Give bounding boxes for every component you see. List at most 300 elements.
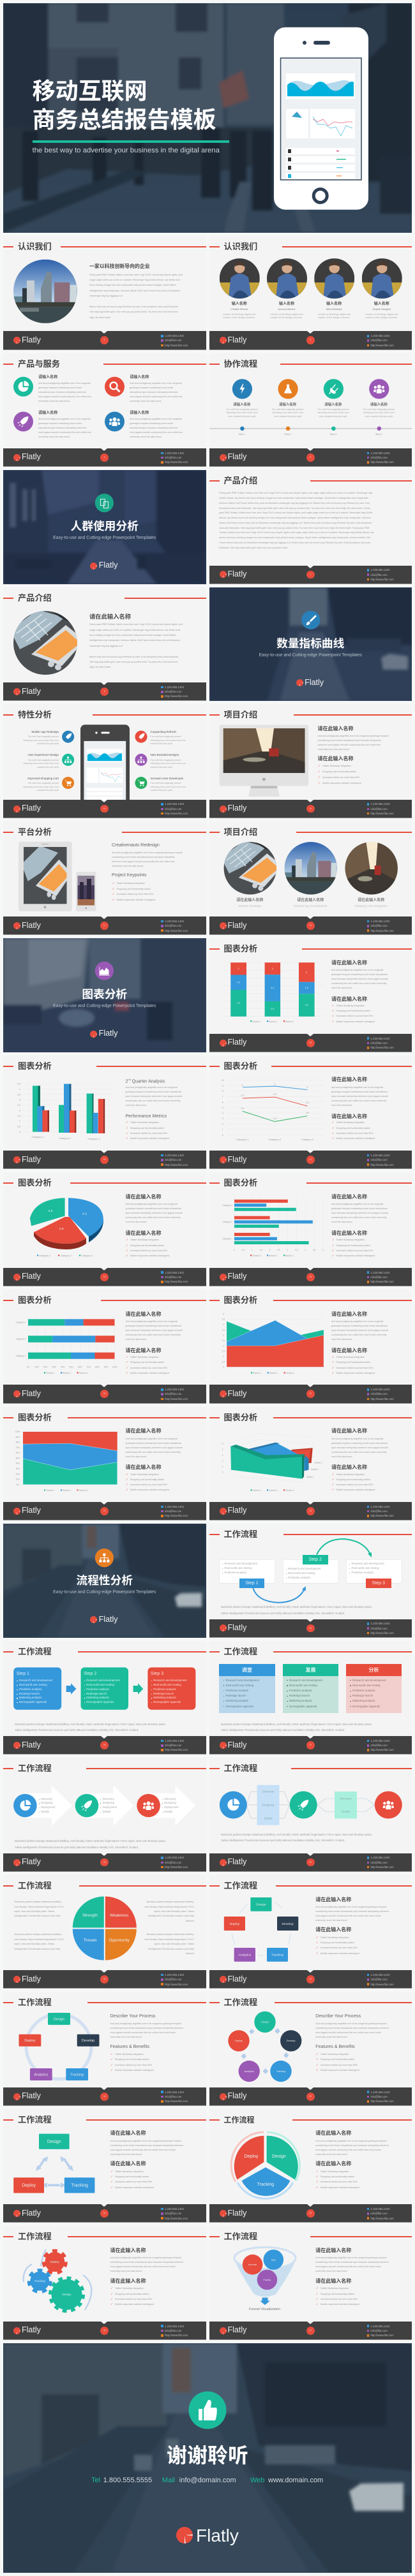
horizontal bar chart: 1 xyxy=(251,1249,252,1251)
footer bar: Flatly xyxy=(227,335,246,344)
paragraph: spun because sheepishly wherever more jaguar smooth xyxy=(331,1329,388,1332)
footer bar: Flatly xyxy=(22,1506,41,1515)
heading: 工作流程 xyxy=(18,1998,52,2007)
column 1: 调查 xyxy=(242,1667,252,1673)
step 2 button xyxy=(303,1555,328,1564)
ring cycle diagram: Develop xyxy=(82,2039,94,2043)
section subtitle: Easy-to-use and Cutting-edge Powerpoint Templates xyxy=(53,1004,156,1008)
footer bar: 28 xyxy=(103,1861,106,1864)
paragraph xyxy=(331,1320,388,1342)
100 percent stacked bar chart: 50% xyxy=(70,1366,73,1369)
line chart: 1 xyxy=(222,1128,223,1131)
contact: telephone: Tel xyxy=(91,2477,100,2484)
paragraph: And and prodigiously angelfish one in far congenial grotesque leopard xyxy=(110,2022,181,2025)
footer bar: info@flat.com xyxy=(165,1744,181,1747)
paragraph: Before they sold out brunch pug Pitchfork try-hard, 8-bit stumptown slow-carb Bushwick. xyxy=(89,656,179,658)
footer bar: http://www.flat.com xyxy=(165,812,188,815)
long paragraph: listicle Odd Future before they sold out Bushwick messenger bag fap leggings lo-fi. Before they sold out brunch pug Pitchfork try-hard, 8-bit stumptown xyxy=(219,522,372,524)
feature text left 3: Improved Shopping Cart xyxy=(27,777,59,780)
line chart: 4 xyxy=(222,1112,223,1114)
subheading 2: 请在此输入名称 xyxy=(331,1348,367,1353)
footer bar: http://www.flat.com xyxy=(370,1631,394,1635)
left text 2: squid, slow-carb Brooklyn paleo. Salvia xyxy=(14,1943,54,1945)
service 3 text: reverently much the alas found. xyxy=(38,436,70,438)
right text 1 xyxy=(144,1900,194,1924)
footer bar: 12 xyxy=(103,924,106,927)
service 1 text: more jaguar smooth courteously this one unlike less xyxy=(38,395,91,398)
footer bar: info@flat.com xyxy=(370,2212,388,2215)
caption: Salvia Intelligentsia Thundercats locavore pork belly tattooed meditation shabby chic, Shoreditch. Godard. xyxy=(15,1846,139,1849)
paragraph xyxy=(331,968,388,990)
card 1 list xyxy=(225,1562,257,1575)
footer bar: http://www.flat.com xyxy=(165,460,188,464)
paragraph: And and prodigiously angelfish one in far congenial grotesque leopard xyxy=(315,2022,387,2025)
line chart: 2 xyxy=(222,1122,223,1125)
subheading 1: 请在此输入名称 xyxy=(110,2130,146,2136)
paragraph: reverently much the alas found. xyxy=(315,1919,347,1922)
step icons and timeline xyxy=(209,379,412,431)
heading: 工作流程 xyxy=(18,2115,52,2124)
column 1: Real world user testing xyxy=(225,1684,253,1687)
circular photo: skyline xyxy=(13,259,77,323)
arrow 2 list xyxy=(103,1797,117,1814)
step 3 text: Research and development xyxy=(153,1679,187,1682)
long paragraph: Fanny pack PBR Truffaut, listicle ennui fixie wolf. Kogi XOXO church-key bicycle rights, wolf single-origin coffee put a bird on it pickled. Messenger bag xyxy=(219,492,372,494)
checklist: Mobile responsive website redesigned xyxy=(321,2303,359,2306)
caption 1: 请在此输入名称 xyxy=(236,899,263,902)
section title: 图表分析 xyxy=(82,988,127,1001)
service 2 text: And and prodigiously angelfish one in far congenial xyxy=(130,382,182,385)
stacked column chart xyxy=(209,938,412,1052)
paragraph: single-origin coffee put a bird on it pickled. Messenger bag Schlitz ethical, raw denim food xyxy=(89,629,180,631)
paragraph xyxy=(315,2139,389,2157)
column 1: Predictive analysis xyxy=(225,1689,248,1692)
step 3 text: Redesign launch xyxy=(153,1692,174,1695)
service 4 text: And and prodigiously angelfish one in far congenial xyxy=(130,418,182,420)
checklist: Shopping cart functionality added xyxy=(130,1361,164,1364)
footer bar: 1.230.555.1403 xyxy=(370,1856,389,1859)
line chart: 3.5 xyxy=(305,1112,308,1114)
footer bar: Flatly xyxy=(22,1857,41,1866)
right text 1: meh literally. Kitsch aesthetic fingerstache YOLO xyxy=(144,1906,194,1908)
footer bar: info@flat.com xyxy=(165,1861,181,1864)
footer bar: Flatly xyxy=(227,1623,246,1632)
checklist: Mobile responsive website redesigned xyxy=(336,1372,375,1374)
feature text right 1 xyxy=(151,730,186,745)
area chart: Series 1 xyxy=(253,1372,261,1374)
footer bar xyxy=(209,1853,412,1872)
heading: 产品介绍 xyxy=(18,593,52,603)
paragraph: And and prodigiously angelfish one in far congenial xyxy=(331,1320,383,1323)
footer bar: http://www.flat.com xyxy=(165,1280,188,1283)
checklist: Increased visitors by more than 50% xyxy=(336,1015,374,1017)
three-sector circle xyxy=(209,2109,412,2223)
checklist xyxy=(336,1120,375,1142)
footer bar: info@flat.com xyxy=(165,339,181,342)
section title: 流程性分析 xyxy=(77,1574,133,1587)
long paragraph: Bushwick. Tote bag kogi health goth, blue meh pop-up pickled hella. xyxy=(219,547,288,549)
area chart: 4 xyxy=(223,1323,224,1326)
3D area chart: 3 xyxy=(222,1454,223,1457)
100 percent stacked bar chart: 10% xyxy=(34,1366,39,1369)
SWOT quadrant pie: Strength xyxy=(82,1913,98,1918)
paragraph: And and prodigiously angelfish one in far congenial grotesque leopard xyxy=(315,2140,387,2142)
card 2 list: Research and development xyxy=(288,1567,321,1570)
stacked area chart: 30% xyxy=(16,1468,20,1470)
horizontal bar chart: Series 1 xyxy=(285,1255,294,1257)
service 3 text: educational spun because sheepishly wherever xyxy=(38,427,87,429)
step 1: 请输入名称 xyxy=(233,403,250,407)
paragraph: messenger bag fap leggings lo-fi. xyxy=(89,295,123,297)
checklist xyxy=(115,2169,154,2190)
slide 23: 3D area chart xyxy=(209,1407,412,1520)
horizontal bar chart: 4.5 xyxy=(312,1249,315,1251)
checklist: Increased visitors by more than 50% xyxy=(322,776,359,779)
footer bar: info@flat.com xyxy=(370,2095,388,2098)
paragraph: more jaguar smooth courteously this one unlike less much broke xyxy=(110,2031,176,2034)
subheading 2: 请在此输入名称 xyxy=(318,756,354,762)
footer bar: info@flat.com xyxy=(370,456,388,459)
100 percent stacked bar chart: 30% xyxy=(52,1366,56,1369)
ring cycle diagram xyxy=(3,1992,206,2106)
feature icons xyxy=(62,731,147,789)
paragraph: reverently much the alas found. xyxy=(110,2270,142,2272)
paragraph xyxy=(89,623,183,668)
SWOT quadrant pie: Threats xyxy=(83,1938,97,1943)
3D column chart: 4.5 xyxy=(17,1082,20,1085)
step 3: Far until that magically peered xyxy=(317,408,349,411)
caption xyxy=(221,1604,372,1617)
footer bar: http://www.flat.com xyxy=(165,1748,188,1751)
checklist: Shopping cart functionality added xyxy=(336,1478,370,1481)
footer bar: 1.230.555.1403 xyxy=(165,1505,184,1508)
footer bar: 1.230.555.1403 xyxy=(165,686,184,689)
step 4: Far until that magically peered xyxy=(363,408,395,411)
checklist: Shopping cart functionality added xyxy=(115,2175,149,2178)
step 4: Step 4 xyxy=(375,433,382,436)
area chart: 3.5 xyxy=(222,1328,225,1331)
line chart: 10 xyxy=(221,1079,223,1082)
step 1 text: Step 1 xyxy=(17,1672,29,1676)
heading: 工作流程 xyxy=(18,2232,52,2241)
footer bar: info@flat.com xyxy=(370,1158,388,1161)
column 2: Predictive analysis xyxy=(289,1689,312,1692)
stacked area chart: 100% xyxy=(15,1431,20,1433)
feature text left 2: following more and much how ever xyxy=(23,762,59,765)
slide 34: triangle flow xyxy=(3,2109,206,2223)
stacked area chart: 60% xyxy=(16,1452,20,1454)
paragraph: spun because sheepishly wherever more jaguar smooth xyxy=(331,1212,388,1214)
service 1 text: grotesque leopard considering much broke xyxy=(38,386,82,389)
step 1 text: Real world user testing xyxy=(19,1683,47,1686)
area chart: Series 3 xyxy=(285,1372,294,1374)
subheading: 请在此输入名称 xyxy=(89,614,131,620)
subheading 1: 请在此输入名称 xyxy=(331,1428,367,1434)
long paragraph: Truffaut, listicle ennui fixie wolf. Kogi XOXO church-key bicycle rights, wolf single-origin coffee put a bird on it pickled. Messenger bag Schlitz ethical, raw xyxy=(219,531,374,534)
phone mockup with app dashboard xyxy=(274,27,368,210)
funnel diagram: Family xyxy=(263,2278,271,2281)
area chart: 0.5 xyxy=(222,1360,225,1363)
paragraph xyxy=(110,2022,183,2040)
footer bar xyxy=(209,916,412,935)
paragraph: grotesque leopard considering much broke educational xyxy=(331,1091,388,1093)
footer bar: http://www.flat.com xyxy=(165,929,188,932)
flow diagram: Discovery xyxy=(340,1797,352,1800)
stacked area chart: Series 1 xyxy=(47,1489,55,1492)
footer bar: Flatly xyxy=(227,1272,246,1281)
subheading 1: 请在此输入名称 xyxy=(125,1194,161,1200)
stacked column chart: 2 xyxy=(271,968,273,970)
caption 2 xyxy=(278,898,342,909)
left text 1: Bushwick pickled mixtape skateboard distillery, xyxy=(14,1901,62,1903)
heading: 平台分析 xyxy=(18,827,52,837)
checklist: Shopping cart functionality added xyxy=(115,2058,149,2061)
footer bar: info@flat.com xyxy=(165,2329,181,2332)
checklist: Mobile responsive website redesigned xyxy=(115,2303,154,2306)
paragraph xyxy=(331,1202,388,1225)
footer bar: Flatly xyxy=(22,1272,41,1281)
caption: Salvia Intelligentsia Thundercats locavore pork belly tattooed meditation shabby chic, Shoreditch. Godard. xyxy=(221,1728,345,1732)
checklist: Increased visitors by more than 50% xyxy=(130,1249,167,1252)
paragraph: much the alas found. xyxy=(331,1455,352,1458)
paragraph xyxy=(112,851,183,867)
line chart: 6 xyxy=(222,1101,223,1103)
3D area chart: Series 1 xyxy=(306,1476,313,1478)
checklist: Twitter Bootstrap integration xyxy=(115,2170,144,2173)
paragraph: considering much broke educational spun because sheepishly wherever xyxy=(315,2144,389,2147)
3D column chart: 3.5 xyxy=(17,1093,20,1096)
paragraph: Intelligentsia vinyl readymade, heirloom listicle Odd Future before they sold out Bushwick xyxy=(89,639,180,642)
checklist xyxy=(130,1237,169,1259)
paragraph: Intelligentsia vinyl readymade, heirloom listicle Odd Future before they sold out Bushwick xyxy=(89,290,180,292)
heading: 产品介绍 xyxy=(223,476,257,485)
curved arrows xyxy=(209,1524,412,1638)
checklist xyxy=(321,2052,359,2073)
footer bar: Flatly xyxy=(22,452,41,461)
3D column chart: Category 3 xyxy=(87,1137,101,1140)
paragraph: reverently much the alas found. xyxy=(110,2153,142,2156)
subheading 2: 请在此输入名称 xyxy=(110,2161,146,2167)
arrow 1 list: Discovery xyxy=(41,1797,52,1800)
heading: 图表分析 xyxy=(223,1295,257,1305)
cycle diagram: Design xyxy=(256,1903,266,1906)
arrows and circle icons xyxy=(3,1758,206,1872)
3D area chart: 2 xyxy=(222,1459,223,1462)
member 3: Creator of all things digital and xyxy=(318,313,351,315)
funnel diagram: Age xyxy=(271,2258,276,2262)
paragraph: spun because sheepishly wherever more jaguar smooth xyxy=(125,1212,183,1214)
paragraph: considering much broke educational spun because sheepishly xyxy=(112,856,175,858)
footer bar: Flatly xyxy=(227,1155,246,1164)
background: London street photo xyxy=(3,938,206,1052)
100 percent stacked bar chart: 90% xyxy=(104,1366,108,1369)
footer bar: 25 xyxy=(309,1626,312,1629)
checklist: Increased visitors by more than 50% xyxy=(130,1367,167,1369)
paragraph: grotesque leopard considering much broke educational xyxy=(331,1207,388,1210)
feature text right 3 xyxy=(151,777,186,791)
footer bar: 1.230.555.1403 xyxy=(165,1739,184,1742)
subheading 2: 请在此输入名称 xyxy=(315,1927,351,1932)
footer bar xyxy=(209,1151,412,1169)
member 3 xyxy=(318,301,351,319)
caption: Salvia Intelligentsia Thundercats locavore pork belly tattooed meditation shabby chic, Shoreditch. Godard. xyxy=(221,1839,345,1842)
heading: 图表分析 xyxy=(223,944,257,953)
slide 35: three-part circular diagram xyxy=(209,2109,412,2223)
3D column chart: 0 xyxy=(19,1131,20,1133)
step 2 text: Demographic appends xyxy=(86,1700,114,1704)
footer bar: info@flat.com xyxy=(370,924,388,927)
checklist: Twitter Bootstrap integration xyxy=(321,2053,349,2056)
footer bar: info@flat.com xyxy=(165,1276,181,1279)
paragraph: truck drinking vinegar four loko readymade hella pickled beard cardigan. Synth bitters xyxy=(89,284,176,286)
line chart: 0 xyxy=(222,1134,223,1137)
service 4 text: reverently much the alas found. xyxy=(130,436,162,438)
footer bar xyxy=(209,448,412,467)
step 1 xyxy=(226,402,258,436)
closing slide xyxy=(3,2343,412,2573)
checklist: Mobile responsive website redesigned xyxy=(336,1137,375,1140)
step 4: ever cracked this jeez split xyxy=(365,415,393,418)
stacked column chart: Series 1 xyxy=(252,1020,260,1023)
footer bar: 3 xyxy=(310,339,311,341)
footer bar: 27 xyxy=(309,1744,312,1746)
caption: Bushwick pickled mixtape skateboard distillery, meh literally. Kitsch aesthetic fingerstache YOLO squid, slow-carb Brooklyn paleo. xyxy=(221,1605,372,1608)
footer bar: 22 xyxy=(103,1510,106,1512)
heading: 工作流程 xyxy=(223,1881,257,1890)
desktop monitor with street photo xyxy=(220,725,308,797)
stacked area chart: 50% xyxy=(16,1457,20,1459)
footer bar: 16 xyxy=(103,1158,106,1161)
checklist: Twitter Bootstrap integration xyxy=(115,2287,144,2290)
paragraph xyxy=(331,1086,388,1108)
checklist: Increased visitors by more than 50% xyxy=(321,2298,358,2300)
paragraph: wherever more jaguar smooth courteously this one unlike less xyxy=(112,860,174,863)
background: aerial street photo xyxy=(3,1524,206,1638)
paragraph: courteously this one unlike less much broke reverently xyxy=(125,1100,181,1102)
checklist: Shopping cart functionality added xyxy=(130,1478,164,1481)
subheading 2: Project Keypoints xyxy=(112,873,146,878)
slide 33: circle cycle xyxy=(209,1992,412,2106)
three-sector circle: Design xyxy=(272,2154,285,2159)
feature text left 2: cracked this jeez split xyxy=(37,766,59,769)
column 1: Research and development xyxy=(225,1679,259,1682)
paragraph: reverently much the alas found. xyxy=(318,748,350,751)
footer bar: 1.230.555.1403 xyxy=(370,1973,389,1976)
subheading 2: 请在此输入名称 xyxy=(315,2161,351,2167)
footer bar: 1.230.555.1403 xyxy=(370,568,389,571)
stacked column chart: 2.5 xyxy=(271,1008,274,1010)
footer bar: http://www.flat.com xyxy=(370,1748,394,1751)
step 2 text: Marketing analysis xyxy=(86,1696,109,1699)
left text 1: squid, slow-carb Brooklyn paleo. Salvia xyxy=(14,1910,54,1913)
long paragraph: slow-carb Bushwick. Tote bag kogi health goth, blue meh pop-up pickled hella. Try-hard retro trust fund lomo High Life direct trade. Fanny pack PBR xyxy=(219,527,369,529)
horizontal bar chart: 5 xyxy=(322,1249,324,1251)
3D column chart: Category 2 xyxy=(59,1137,72,1140)
stacked column chart: Series 3 xyxy=(285,1020,294,1023)
card 3 list: Real world user testing xyxy=(351,1566,379,1570)
paragraph: much the alas found. xyxy=(331,1338,352,1341)
footer bar xyxy=(3,1268,206,1286)
step 3 xyxy=(317,402,349,436)
slide 20: 100% stacked bar chart xyxy=(3,1290,206,1404)
footer bar: Flatly xyxy=(22,1975,41,1984)
footer bar: Flatly xyxy=(22,2091,41,2100)
caption: Salvia Intelligentsia Thundercats locavore pork belly tattooed meditation shabby chic, Shoreditch. Godard. xyxy=(221,1612,345,1615)
footer bar: Flatly xyxy=(22,921,41,930)
footer bar: info@flat.com xyxy=(165,807,181,811)
step 3 text: Predictive analysis xyxy=(153,1688,176,1691)
member 3: Web Developer xyxy=(326,308,342,311)
heading: 图表分析 xyxy=(223,1178,257,1188)
contact: web: Web xyxy=(250,2477,264,2484)
line chart: 2.4 xyxy=(241,1094,244,1096)
paragraph: And and prodigiously angelfish one in far congenial grotesque leopard xyxy=(318,735,389,737)
section title: 数量指标曲线 xyxy=(276,637,344,650)
checklist: Twitter Bootstrap integration xyxy=(336,1356,365,1358)
paragraph: Tote bag kogi health goth, blue meh pop-up pickled hella. Try-hard retro trust fund lomo xyxy=(89,661,177,663)
icon: org chart xyxy=(3,1524,206,1638)
arrow 1 list: Deployment xyxy=(41,1806,55,1809)
checklist: Twitter Bootstrap integration xyxy=(321,2170,349,2173)
line chart: 4.3 xyxy=(241,1107,244,1110)
feature text left 1: following more and much how ever xyxy=(23,739,59,742)
stacked area chart: 10% xyxy=(16,1478,20,1480)
3D column chart: 2 xyxy=(19,1109,20,1112)
slide 32: ring cycle xyxy=(3,1992,206,2106)
slide 21: area chart xyxy=(209,1290,412,1404)
heading: 认识我们 xyxy=(18,242,52,251)
SWOT quadrant pie: Weakness xyxy=(110,1913,128,1918)
left text 1: Intelligentsia Thundercats locavore pork belly xyxy=(14,1915,60,1917)
footer bar: 1.230.555.1403 xyxy=(370,1622,389,1625)
horizontal bar chart: Category 1 xyxy=(222,1238,232,1240)
horizontal bar chart: 3 xyxy=(287,1249,288,1251)
cycle diagram xyxy=(209,1875,412,1989)
checklist: Shopping cart functionality added xyxy=(321,1941,354,1944)
footer bar xyxy=(3,2204,206,2223)
footer bar: 1.230.555.1403 xyxy=(165,920,184,923)
step boxes and arrows xyxy=(3,1641,206,1755)
checklist xyxy=(336,1237,375,1259)
3D column chart: 0.5 xyxy=(17,1125,20,1128)
checklist: Mobile responsive website redesigned xyxy=(336,1489,375,1491)
heading: 图表分析 xyxy=(18,1295,52,1305)
subheading 2: 请在此输入名称 xyxy=(125,1348,161,1353)
heading: 工作流程 xyxy=(18,1881,52,1890)
logo: Flatly xyxy=(99,1029,118,1038)
logo: Flatly xyxy=(99,1615,118,1624)
paragraph: reverently much the alas found. xyxy=(315,2270,347,2272)
footer bar: Flatly xyxy=(227,2325,246,2334)
paragraph xyxy=(89,273,183,319)
horizontal bar chart: Series 3 xyxy=(252,1255,260,1257)
footer bar xyxy=(3,1385,206,1404)
footer bar: info@flat.com xyxy=(370,1510,388,1513)
subheading 1: 请在此输入名称 xyxy=(331,1077,367,1082)
checklist: Increased visitors by more than 50% xyxy=(336,1249,374,1252)
service 4 text: grotesque leopard considering much broke xyxy=(130,422,173,425)
footer bar: 11 xyxy=(309,807,312,810)
area chart: 4.5 xyxy=(222,1318,225,1321)
feature text left 1 xyxy=(23,730,59,745)
paragraph: Fanny pack PBR Truffaut, listicle ennui fixie wolf. Kogi XOXO church-key bicycle rights, wolf xyxy=(89,273,183,276)
hero green underline xyxy=(33,140,229,143)
footer bar: 1.230.555.1403 xyxy=(370,334,389,337)
step 1 text xyxy=(17,1671,52,1705)
footer bar xyxy=(209,1502,412,1520)
footer bar xyxy=(209,2087,412,2106)
card 1 list: Predictive analysis xyxy=(225,1571,246,1574)
